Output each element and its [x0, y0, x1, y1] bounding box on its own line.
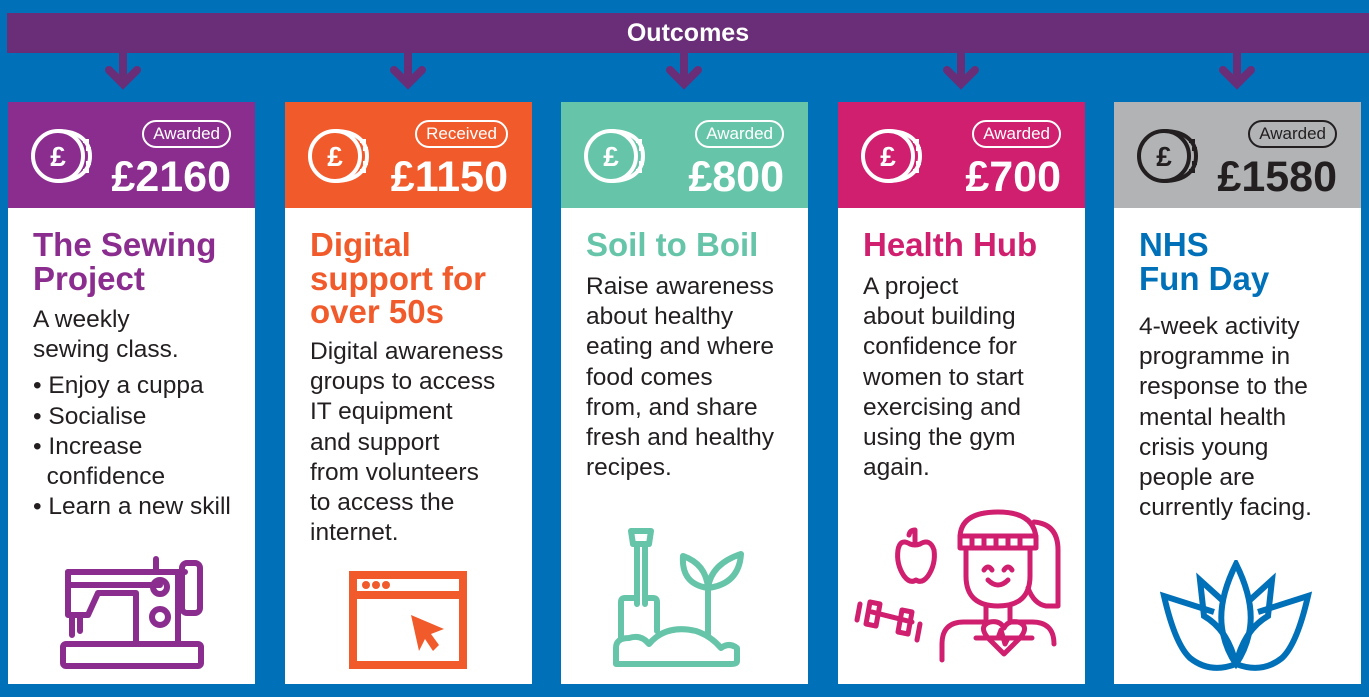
title: The Sewing	[33, 226, 216, 263]
text: IT equipment	[310, 398, 453, 425]
text: • Increase	[33, 433, 142, 460]
text: Raise awareness	[586, 273, 774, 300]
text	[863, 273, 1024, 481]
text: programme in	[1139, 343, 1290, 370]
header: Awarded	[1259, 124, 1326, 143]
text: 4-week activity	[1139, 313, 1300, 340]
text: exercising and	[863, 394, 1021, 421]
title	[310, 226, 486, 330]
icon: spade and sprout	[613, 528, 744, 667]
title: Health Hub	[863, 226, 1037, 263]
title: Digital	[310, 226, 411, 263]
text	[310, 338, 503, 546]
title: Fun Day	[1139, 260, 1269, 296]
header: £800	[688, 153, 784, 201]
title	[33, 226, 216, 297]
title: support for	[310, 260, 486, 296]
text: confidence for	[863, 333, 1017, 360]
icon: woman fitness	[854, 510, 1060, 662]
text: from volunteers	[310, 459, 479, 486]
text: eating and where	[586, 333, 774, 360]
text: groups to access	[310, 368, 495, 395]
header: £1150	[391, 153, 508, 201]
text: sewing class.	[33, 336, 179, 363]
text: • Learn a new skill	[33, 493, 231, 520]
title	[1139, 226, 1269, 297]
header: £1580	[1217, 153, 1337, 201]
icon: coin: £	[50, 141, 66, 172]
outcomes banner	[7, 13, 1369, 53]
text: about building	[863, 303, 1016, 330]
text: A weekly	[33, 306, 130, 333]
icon: lotus	[1160, 560, 1312, 671]
text: mental health	[1139, 404, 1286, 431]
icon: coin	[31, 129, 92, 183]
icon: coin	[861, 129, 922, 183]
text: Digital awareness	[310, 338, 503, 365]
text: currently facing.	[1139, 494, 1312, 521]
header	[8, 102, 255, 208]
header: £2160	[111, 153, 231, 201]
header: Awarded	[706, 124, 773, 143]
text: • Enjoy a cuppa	[33, 372, 204, 399]
panel: sewing project	[8, 102, 255, 684]
text: fresh and healthy	[586, 424, 774, 451]
icon: coin	[308, 129, 369, 183]
text: A project	[863, 273, 958, 300]
text: to access the	[310, 489, 454, 516]
panel: soil to boil	[561, 102, 808, 684]
header: Awarded	[153, 124, 220, 143]
panel: health hub	[838, 102, 1085, 684]
icon: coin	[584, 129, 645, 183]
text: from, and share	[586, 394, 758, 421]
header	[838, 102, 1085, 208]
icon: coin: £	[880, 141, 896, 172]
text: women to start	[863, 364, 1024, 391]
title: NHS	[1139, 226, 1209, 263]
text: people are	[1139, 464, 1255, 491]
text: confidence	[47, 463, 165, 490]
title: over 50s	[310, 293, 444, 330]
header	[1114, 102, 1361, 208]
text	[1139, 313, 1312, 521]
text: food comes	[586, 364, 713, 391]
text: recipes.	[586, 454, 672, 481]
header: Awarded	[983, 124, 1050, 143]
text: response to the	[1139, 373, 1308, 400]
icon: coin	[1137, 129, 1198, 183]
text	[33, 306, 231, 520]
text: and support	[310, 429, 439, 456]
text: crisis young	[1139, 434, 1268, 461]
text: using the gym	[863, 424, 1016, 451]
title: Soil to Boil	[586, 226, 758, 263]
header: Received	[426, 124, 497, 143]
panel: digital support	[285, 102, 532, 684]
text: internet.	[310, 519, 399, 546]
icon: coin: £	[1156, 141, 1172, 172]
header	[285, 102, 532, 208]
text: about healthy	[586, 303, 733, 330]
icon: coin: £	[603, 141, 619, 172]
text	[586, 273, 774, 481]
text: • Socialise	[33, 403, 146, 430]
header: £700	[965, 153, 1061, 201]
icon: browser	[349, 571, 467, 669]
title: Project	[33, 260, 145, 296]
header	[561, 102, 808, 208]
icon: coin: £	[327, 141, 343, 172]
arrows	[105, 53, 1255, 90]
outcomes banner: Outcomes	[627, 19, 749, 47]
panel: nhs fun day	[1114, 102, 1361, 684]
text: again.	[863, 454, 930, 481]
icon: sewing machine	[60, 556, 204, 669]
